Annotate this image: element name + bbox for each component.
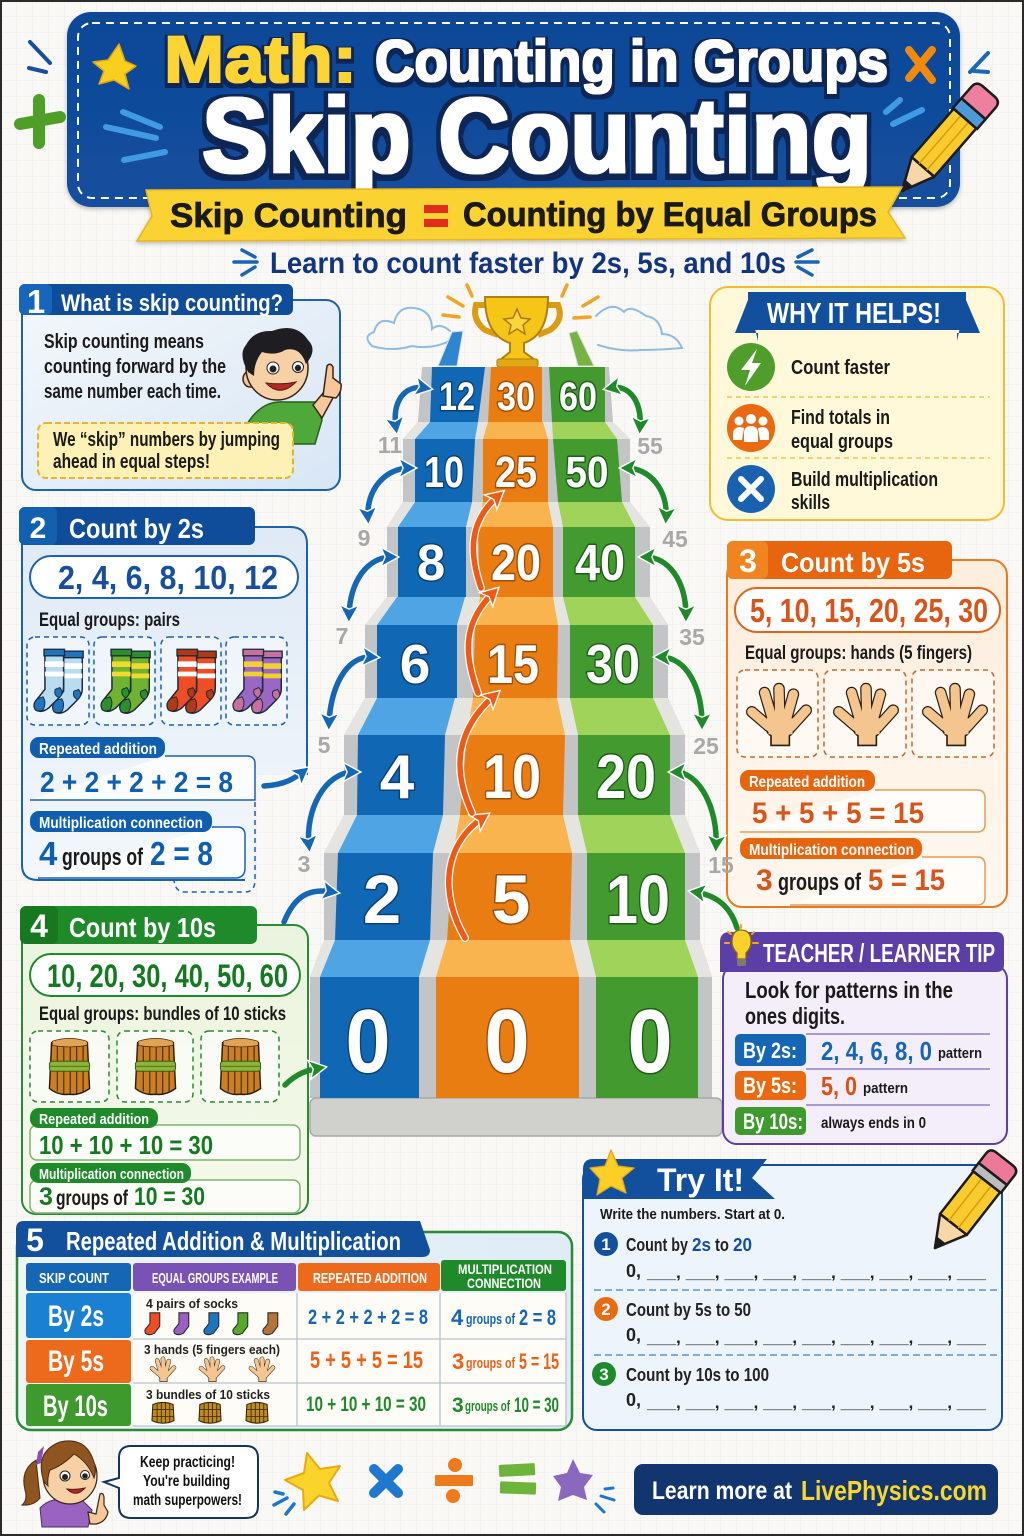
table column headers: MULTIPLICATION <box>458 1261 552 1277</box>
footer <box>22 1441 998 1527</box>
icon: orange divide <box>435 1458 473 1503</box>
row: by 10s: 3 <box>452 1394 464 1417</box>
learn more button <box>634 1464 998 1515</box>
row: by 5s: 3 hands (5 fingers each) <box>144 1342 280 1357</box>
title line one <box>164 22 888 96</box>
step numbers blue: 6 <box>400 633 430 695</box>
panel: count by 10s <box>20 906 308 1214</box>
panel: why it helps <box>710 287 1004 520</box>
tip row: by 2s: pattern <box>938 1045 982 1062</box>
panel 1 body text: counting forward by the <box>44 356 226 378</box>
table header ribbon <box>16 1221 430 1258</box>
multiplication connection: Multiplication connection <box>39 1166 184 1183</box>
try it ribbon: Try It! <box>657 1162 744 1198</box>
step numbers blue: 2 <box>363 861 401 938</box>
repeated addition: 5 + 5 + 5 = 15 <box>752 797 924 830</box>
exercise 3 <box>592 1362 987 1412</box>
header panel <box>67 12 960 207</box>
stick bundles <box>30 1031 279 1102</box>
multiplication connection: Multiplication connection <box>39 815 203 832</box>
skipped numbers: 15 <box>708 852 734 878</box>
repeated addition <box>740 770 985 832</box>
table column headers: EQUAL GROUPS EXAMPLE <box>152 1270 278 1287</box>
header banner <box>20 12 1001 241</box>
exercise 1 <box>594 1232 987 1282</box>
tip row: by 5s: 5, 0 <box>821 1071 857 1101</box>
exercise 3: ___, ___, ___, ___, ___, ___, ___, ___, ___ <box>646 1393 987 1412</box>
multiplication connection: 10 = 30 <box>134 1183 205 1211</box>
icon: yellow star <box>93 44 136 89</box>
step numbers green: 0 <box>628 992 672 1092</box>
table column headers: REPEATED ADDITION <box>313 1270 427 1287</box>
row: by 10s: 10 = 30 <box>514 1394 559 1417</box>
row: by 10s <box>26 1384 559 1426</box>
multiplication connection: 3 <box>39 1183 53 1211</box>
row: by 2s: 2 + 2 + 2 + 2 = 8 <box>308 1306 428 1329</box>
exercise 1: Count by <box>626 1235 688 1255</box>
instructions: Write the numbers. Start at 0. <box>600 1206 785 1223</box>
step numbers orange: 10 <box>483 743 541 812</box>
exercise 2: 2 <box>601 1300 611 1319</box>
step numbers orange <box>483 375 541 1092</box>
skipped numbers: 11 <box>378 432 402 458</box>
exercise 2 <box>594 1297 987 1347</box>
repeated addition <box>30 1108 300 1160</box>
clouds <box>367 307 682 350</box>
try it ribbon <box>583 1159 775 1199</box>
ribbon heading: WHY IT HELPS! <box>767 298 941 330</box>
multiplication connection: 2 = 8 <box>150 835 213 872</box>
step numbers green: 60 <box>559 375 597 419</box>
multiplication connection: groups of <box>778 869 862 896</box>
panel: count by 2s <box>19 507 307 892</box>
icon: yellow star with sparks <box>274 1453 340 1514</box>
panel 2 header <box>19 507 255 545</box>
icon: boy pointing <box>242 328 341 444</box>
repeated addition: 2 + 2 + 2 + 2 = 8 <box>40 767 233 799</box>
step numbers orange: 20 <box>491 534 541 591</box>
step numbers orange: 0 <box>484 992 530 1092</box>
callout: skip meaning <box>38 423 293 478</box>
benefit: equal groups: equal groups <box>791 431 893 453</box>
table column headers <box>26 1260 566 1291</box>
tip row: by 5s <box>735 1071 908 1101</box>
green arrows <box>285 387 737 1085</box>
row: by 5s: 5 = 15 <box>519 1349 559 1374</box>
multiplication connection <box>740 838 985 905</box>
tip body text: Look for patterns in the <box>745 977 953 1003</box>
step numbers green <box>559 375 672 1092</box>
exercise 1: 20 <box>733 1235 752 1255</box>
multiplication connection <box>30 802 255 892</box>
row: by 5s <box>26 1340 559 1383</box>
step numbers blue: 8 <box>417 534 445 591</box>
icon: pencil <box>890 81 1001 201</box>
tip row: by 2s <box>735 1034 982 1066</box>
sparks left <box>29 42 988 160</box>
skipped numbers: 9 <box>358 525 370 551</box>
skipped numbers: 45 <box>662 526 688 552</box>
title line one: Math: <box>164 22 357 96</box>
exercise 1: 0, <box>626 1261 641 1281</box>
step numbers green: 10 <box>606 861 670 938</box>
step numbers green: 40 <box>575 534 625 591</box>
callout: skip meaning: We “skip” numbers by jumping <box>53 429 280 451</box>
row: by 2s: By 2s <box>48 1300 104 1333</box>
table column headers: CONNECTION <box>467 1275 541 1291</box>
benefit: equal groups: Find totals in <box>791 407 890 429</box>
benefit: multiplication: Build multiplication <box>791 469 938 491</box>
table header ribbon: 5 <box>26 1222 44 1258</box>
panel 4 header: 4 <box>30 908 48 944</box>
step numbers blue: 10 <box>424 448 464 497</box>
panel 4 header <box>20 906 257 944</box>
row: by 5s: 5 + 5 + 5 = 15 <box>310 1347 423 1374</box>
benefit: equal groups <box>727 404 893 453</box>
row: by 10s: groups of <box>465 1398 511 1415</box>
row: by 2s: 4 <box>451 1305 464 1330</box>
table column headers: SKIP COUNT <box>39 1270 109 1287</box>
repeated addition: Repeated addition <box>39 1111 149 1128</box>
callout: skip meaning: ahead in equal steps! <box>53 451 210 473</box>
benefit: count faster <box>727 343 890 391</box>
benefit: count faster: Count faster <box>791 357 890 379</box>
speech bubble <box>104 1446 258 1518</box>
skipped numbers: 3 <box>298 851 310 877</box>
panel: teacher tip <box>720 925 1007 1144</box>
sequence pill: 10, 20, 30, 40, 50, 60 <box>47 958 288 994</box>
blue arrows <box>264 387 426 922</box>
repeated addition: Repeated addition <box>39 741 157 758</box>
panel 4 header: Count by 10s <box>69 912 216 943</box>
icon: light bulb <box>725 925 758 966</box>
row: by 10s: By 10s <box>43 1390 108 1423</box>
row: by 2s: 4 pairs of socks <box>146 1296 238 1311</box>
icon: orange times sign <box>909 50 932 80</box>
skipped numbers: 5 <box>318 732 331 758</box>
repeated addition: 10 + 10 + 10 = 30 <box>39 1130 213 1160</box>
equal groups label: Equal groups: pairs <box>39 610 180 631</box>
repeated addition <box>30 737 255 800</box>
tip body text: ones digits. <box>745 1003 845 1029</box>
top ramps <box>438 331 594 366</box>
repeated addition: Repeated addition <box>749 774 865 791</box>
row: by 2s <box>26 1293 556 1338</box>
row: by 10s: 10 + 10 + 10 = 30 <box>306 1393 426 1416</box>
exercise 1: to <box>715 1235 729 1255</box>
panel: try it <box>583 1148 1019 1430</box>
step numbers blue: 4 <box>380 743 415 812</box>
blue column <box>320 367 485 1098</box>
learn more button: LivePhysics.com <box>801 1475 987 1506</box>
tip row: by 10s: By 10s: <box>743 1109 803 1134</box>
step numbers orange: 15 <box>487 633 539 695</box>
panel 1 header <box>19 283 293 320</box>
panel 1 header: What is skip counting? <box>61 290 283 317</box>
row: by 5s: By 5s <box>48 1345 104 1378</box>
row: by 5s: 3 <box>452 1349 464 1374</box>
exercise 1: 2s <box>692 1235 711 1255</box>
multiplication connection: groups of <box>56 1187 129 1210</box>
icon: star <box>590 1150 634 1195</box>
panel 2 header: Count by 2s <box>69 513 204 544</box>
multiplication connection: groups of <box>62 844 144 871</box>
tip row: by 2s: 2, 4, 6, 8, 0 <box>821 1036 932 1066</box>
panel: what is skip counting <box>19 283 341 490</box>
panel: repeated addition and multiplication table <box>16 1221 572 1430</box>
hand groups <box>737 670 994 757</box>
exercise 2: ___, ___, ___, ___, ___, ___, ___, ___, ___ <box>646 1328 987 1347</box>
exercise 1: 1 <box>601 1235 611 1254</box>
skipped numbers: 55 <box>637 433 663 459</box>
skipped numbers <box>298 432 734 878</box>
ribbon heading <box>735 292 980 341</box>
multiplication connection: 5 = 15 <box>868 864 945 897</box>
title line two: Skip Counting <box>202 77 872 195</box>
panel 3 header <box>727 541 952 579</box>
panel 3 header: Count by 5s <box>781 547 925 578</box>
exercise 3: 0, <box>626 1390 641 1410</box>
multiplication connection: 4 <box>39 835 58 872</box>
exercise 1: ___, ___, ___, ___, ___, ___, ___, ___, ___ <box>646 1263 987 1282</box>
step numbers blue: 12 <box>439 375 475 419</box>
step numbers green: 30 <box>586 633 640 695</box>
sock groups <box>27 637 287 725</box>
row: by 2s: groups of <box>466 1311 516 1328</box>
equal groups label: Equal groups: hands (5 fingers) <box>745 643 972 664</box>
speech bubble: math superpowers! <box>133 1492 242 1509</box>
step numbers orange: 25 <box>495 448 537 497</box>
exercise 3: 3 <box>599 1365 609 1384</box>
staircase <box>310 285 722 1136</box>
icon: blue times <box>374 1469 398 1493</box>
panel: count by 5s <box>727 541 1007 907</box>
tip row: by 10s <box>735 1107 926 1135</box>
tip row: by 10s: always ends in 0 <box>821 1115 926 1132</box>
skipped numbers: 35 <box>679 624 705 650</box>
icon: green equals <box>499 1463 536 1495</box>
panel 2 header: 2 <box>30 512 46 545</box>
tip body text <box>745 977 953 1029</box>
panel 1 body text: same number each time. <box>44 381 221 403</box>
subtitle: Learn to count faster by 2s, 5s, and 10s <box>270 247 786 280</box>
trophy <box>443 285 598 367</box>
exercise 2: 0, <box>626 1325 641 1345</box>
sequence pill <box>30 954 300 996</box>
panel 1 body text <box>44 331 226 403</box>
step numbers green: 50 <box>566 448 608 497</box>
exercise 2: Count by 5s to 50 <box>626 1300 751 1320</box>
step numbers blue: 0 <box>346 992 390 1092</box>
benefit: multiplication <box>727 465 938 514</box>
benefit: multiplication: skills <box>791 492 830 514</box>
tip header <box>720 932 1004 972</box>
icon: pencil <box>921 1148 1019 1259</box>
table body cells <box>133 1293 566 1426</box>
learn more button: Learn more at <box>652 1477 793 1505</box>
panel 1 body text: Skip counting means <box>44 331 204 353</box>
exercise 3: Count by 10s to 100 <box>626 1365 769 1385</box>
row: by 2s: 2 = 8 <box>519 1305 556 1330</box>
multiplication connection: 3 <box>756 864 773 897</box>
orange arrows <box>449 495 499 938</box>
tip row: by 5s: By 5s: <box>743 1073 797 1098</box>
yellow ribbon tagline: Counting by Equal Groups <box>463 196 877 234</box>
step numbers green: 20 <box>596 743 656 812</box>
step numbers orange: 30 <box>497 375 535 419</box>
icon: green plus <box>20 100 60 143</box>
step numbers blue <box>346 375 475 1092</box>
speech bubble: You're building <box>143 1473 230 1490</box>
yellow ribbon tagline <box>137 187 905 241</box>
table header ribbon: Repeated Addition & Multiplication <box>66 1226 401 1256</box>
yellow ribbon tagline: Skip Counting <box>170 197 407 235</box>
icon: girl character <box>22 1441 108 1527</box>
panel 1 header: 1 <box>27 283 45 320</box>
step numbers orange: 5 <box>492 861 530 938</box>
tip row: by 5s: pattern <box>863 1080 908 1097</box>
title line one: Counting in Groups <box>375 29 888 94</box>
sequence pill: 2, 4, 6, 8, 10, 12 <box>58 559 278 596</box>
row: by 10s: 3 bundles of 10 sticks <box>146 1387 270 1402</box>
green column <box>549 367 698 1098</box>
tip row: by 2s: By 2s: <box>743 1038 797 1063</box>
row: by 5s: groups of <box>466 1355 516 1372</box>
skipped numbers: 25 <box>693 733 719 759</box>
panel 3 header: 3 <box>739 543 757 579</box>
gray stair sides <box>310 367 722 1136</box>
orange column <box>436 367 579 1098</box>
multiplication connection <box>30 1163 300 1213</box>
equal groups label: Equal groups: bundles of 10 sticks <box>39 1004 286 1025</box>
skipped numbers: 7 <box>336 623 348 649</box>
speech bubble: Keep practicing! <box>140 1454 235 1471</box>
icon: purple star with sparks <box>553 1459 614 1512</box>
multiplication connection: Multiplication connection <box>749 842 914 859</box>
